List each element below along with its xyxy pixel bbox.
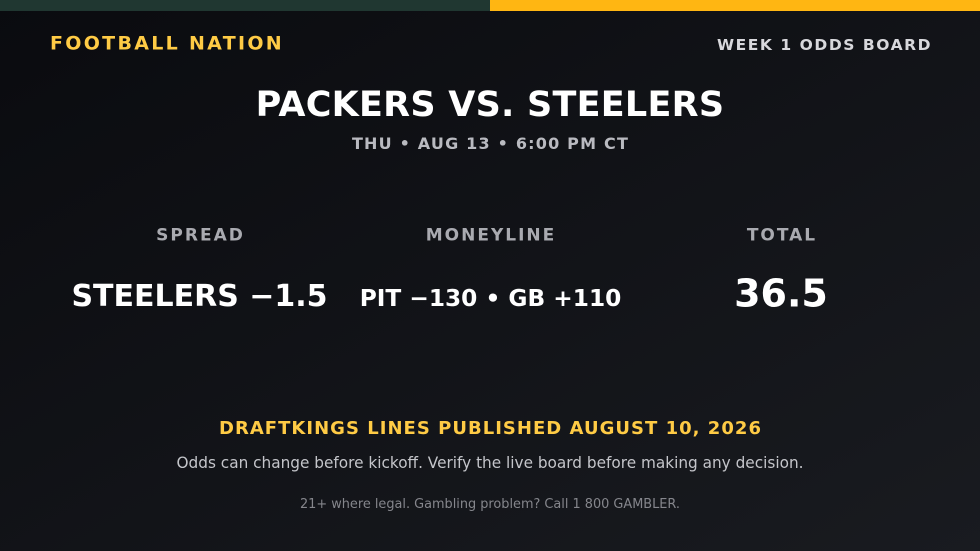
- spread value: STEELERS −1.5: [71, 279, 328, 314]
- moneyline value: PIT −130 • GB +110: [360, 285, 621, 312]
- title: PACKERS VS. STEELERS: [256, 85, 724, 125]
- odds panel: total: [734, 226, 828, 316]
- odds panel: spread: [71, 226, 328, 314]
- game time: THU • AUG 13 • 6:00 PM CT: [352, 134, 629, 153]
- total label: TOTAL: [747, 226, 817, 246]
- source line: DRAFTKINGS LINES PUBLISHED AUGUST 10, 2026: [219, 418, 762, 439]
- brand: Football Nation: FOOTBALL NATION: [50, 32, 284, 54]
- moneyline label: MONEYLINE: [426, 226, 556, 246]
- responsible gambling note: 21+ where legal. Gambling problem? Call 1 800 GAMBLER.: [300, 496, 680, 512]
- spread label: SPREAD: [156, 226, 245, 246]
- label: Week 1 Odds Board: WEEK 1 ODDS BOARD: [717, 36, 932, 54]
- odds panel: moneyline: [360, 226, 621, 312]
- top colour bar: [0, 0, 980, 11]
- disclaimer: Odds can change before kickoff. Verify the live board before making any decision.: [176, 453, 804, 472]
- total value: 36.5: [734, 272, 828, 316]
